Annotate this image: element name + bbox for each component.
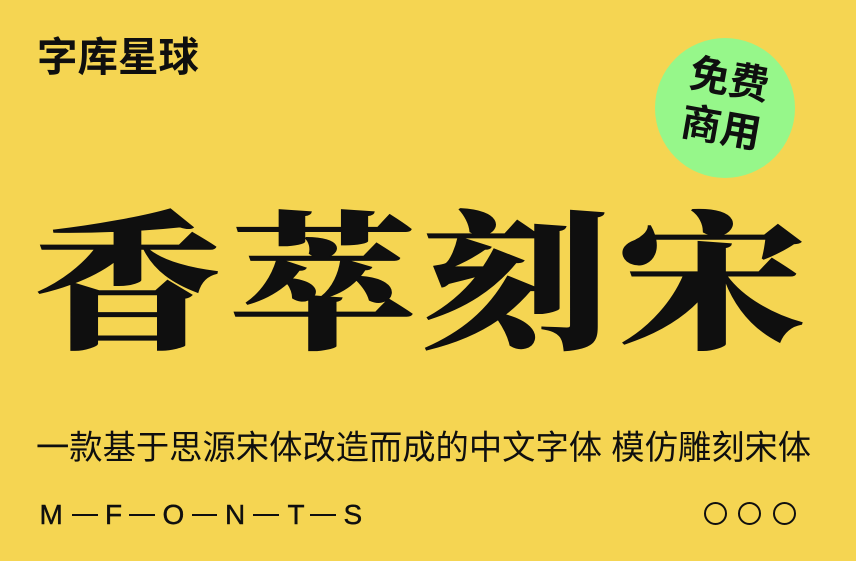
MFONTS wordmark — [40, 499, 362, 530]
badge text: 商用 — [678, 100, 764, 157]
MFONTS wordmark: N — [225, 499, 245, 530]
badge text — [678, 52, 773, 157]
MFONTS wordmark: T — [288, 499, 305, 530]
MFONTS wordmark: S — [344, 499, 362, 530]
badge: free for commercial use — [655, 38, 795, 178]
MFONTS wordmark: M — [40, 499, 63, 530]
title glyph 萃: 萃 — [229, 204, 417, 369]
MFONTS wordmark: F — [105, 499, 122, 530]
brand heading: 字库星球 — [37, 34, 199, 80]
main title — [34, 204, 806, 369]
badge text: 免费 — [686, 52, 773, 109]
title glyph 宋: 宋 — [618, 204, 806, 369]
subtitle: 一款基于思源宋体改造而成的中文字体 模仿雕刻宋体 — [36, 430, 811, 467]
three outlined circles — [704, 502, 796, 525]
title glyph 刻: 刻 — [421, 204, 609, 369]
MFONTS wordmark: O — [162, 499, 184, 530]
title glyph 香: 香 — [34, 204, 222, 369]
